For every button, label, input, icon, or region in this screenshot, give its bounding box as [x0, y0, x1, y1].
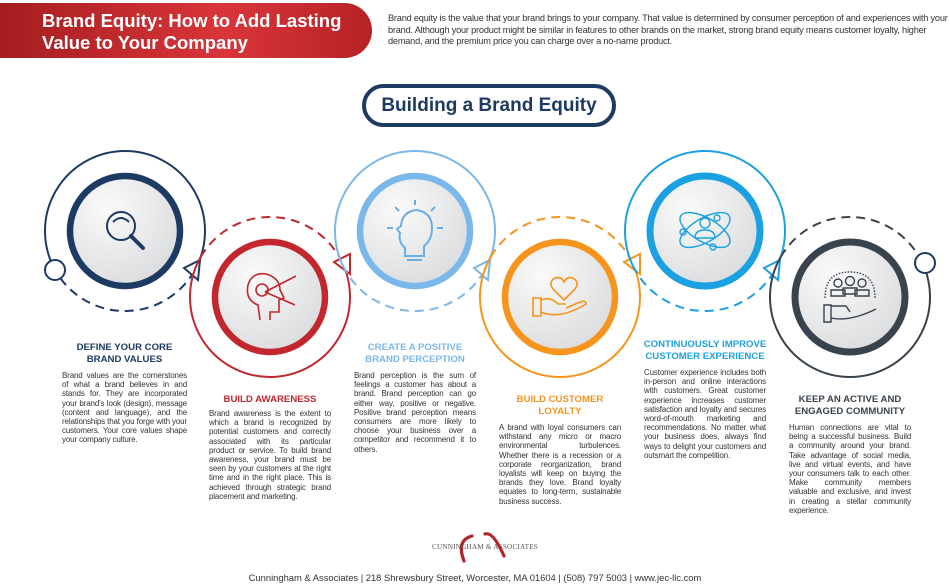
text: define core brand values: DEFINE YOUR CORE	[77, 342, 172, 353]
text: active community: Human connections are vital to being a successful business. Build a community around your brand. Take advantage of social media, live and virtual events, and have your consumers talk to each other. Make community members valuable and exclusive, and invest in creating a stellar community experience.	[789, 423, 911, 515]
title text: Brand Equity: How to Add Lasting	[42, 10, 341, 31]
circle 2: build awareness	[190, 217, 350, 377]
circle 3: positive perception	[335, 151, 495, 311]
text: positive brand perception: BRAND PERCEPTION	[365, 354, 465, 365]
circle 4: customer loyalty	[480, 217, 640, 377]
icon: heart in hand	[533, 278, 586, 316]
footer contact: Cunningham & Associates | 218 Shrewsbury Street, Worcester, MA 01604 | (508) 797 5003 | www.jec-llc.com	[249, 572, 701, 583]
text: build awareness: BUILD AWARENESS	[224, 394, 316, 405]
text: customer experience: Customer experience includes both in-person and online interactions with customers. Great customer experience increases customer satisfaction and loyalty and secures word-of-mouth marketing and recommendations. No matter what your business does, always find ways to delight your customers and outsmart the competition.	[644, 368, 766, 460]
icon: lightbulb head	[387, 200, 443, 260]
text: positive brand perception: CREATE A POSITIVE	[368, 342, 462, 353]
circles diagram	[44, 150, 936, 378]
icon: people in hand	[824, 272, 876, 322]
text: customer loyalty: LOYALTY	[538, 406, 582, 417]
circle 6: active community	[770, 217, 935, 377]
icon: atom person	[675, 206, 735, 254]
logo	[432, 532, 538, 563]
text: define core brand values: Brand values are the cornerstones of what a brand believes in and stands for. They are incorporated your brand's look (design), message (content and language), and the relationships that you forge with your customers. Your core values shape your company culture.	[62, 371, 187, 444]
circle 5: customer experience	[625, 151, 785, 311]
text: active community: KEEP AN ACTIVE AND	[799, 394, 901, 405]
text: active community: ENGAGED COMMUNITY	[795, 406, 905, 417]
circle 1: define core brand values	[45, 151, 205, 311]
title banner	[0, 3, 372, 58]
text: customer experience: CONTINUOUSLY IMPROVE	[644, 339, 766, 350]
text: build awareness: Brand awareness is the extent to which a brand is recognized by potential customers and correctly associated with its particular product or service. To build brand awareness, your brand must be seen by your customers at the right time and in the right place. This is achieved through strategic brand placement and marketing.	[209, 409, 331, 501]
intro text: Brand equity is the value that your brand brings to your company. That value is determined by consumer perception of and experiences with your brand. Although your product might be similar in features to other brands on the market, strong brand equity means customer loyalty, higher demand, and the premium price you can charge over a no-name product.	[388, 13, 948, 46]
text: customer loyalty: BUILD CUSTOMER	[517, 394, 603, 405]
text: customer experience: CUSTOMER EXPERIENCE	[645, 351, 765, 362]
logo: CUNNINGHAM & ASSOCIATES	[432, 543, 538, 551]
text: positive brand perception: Brand perception is the sum of feelings a customer has about a brand. Brand perception can go either way, positive or negative. Positive brand perception means consumers are more likely to choose your business over a competitor and recommend it to others.	[354, 371, 476, 454]
text: customer loyalty: A brand with loyal consumers can withstand any micro or macro environmental turbulences. Whether there is a recession or a corporate reorganization, brand loyalists will keep on buying the brands they love. Brand loyalty equates to long-term, sustainable business success.	[499, 423, 621, 506]
section heading pill: Building a Brand Equity	[381, 95, 597, 116]
icon: head	[247, 274, 296, 320]
title text: Value to Your Company	[42, 32, 248, 53]
title text	[42, 10, 341, 53]
text: define core brand values: BRAND VALUES	[87, 354, 162, 365]
icon: magnifier	[107, 212, 143, 248]
section heading pill	[362, 84, 616, 127]
